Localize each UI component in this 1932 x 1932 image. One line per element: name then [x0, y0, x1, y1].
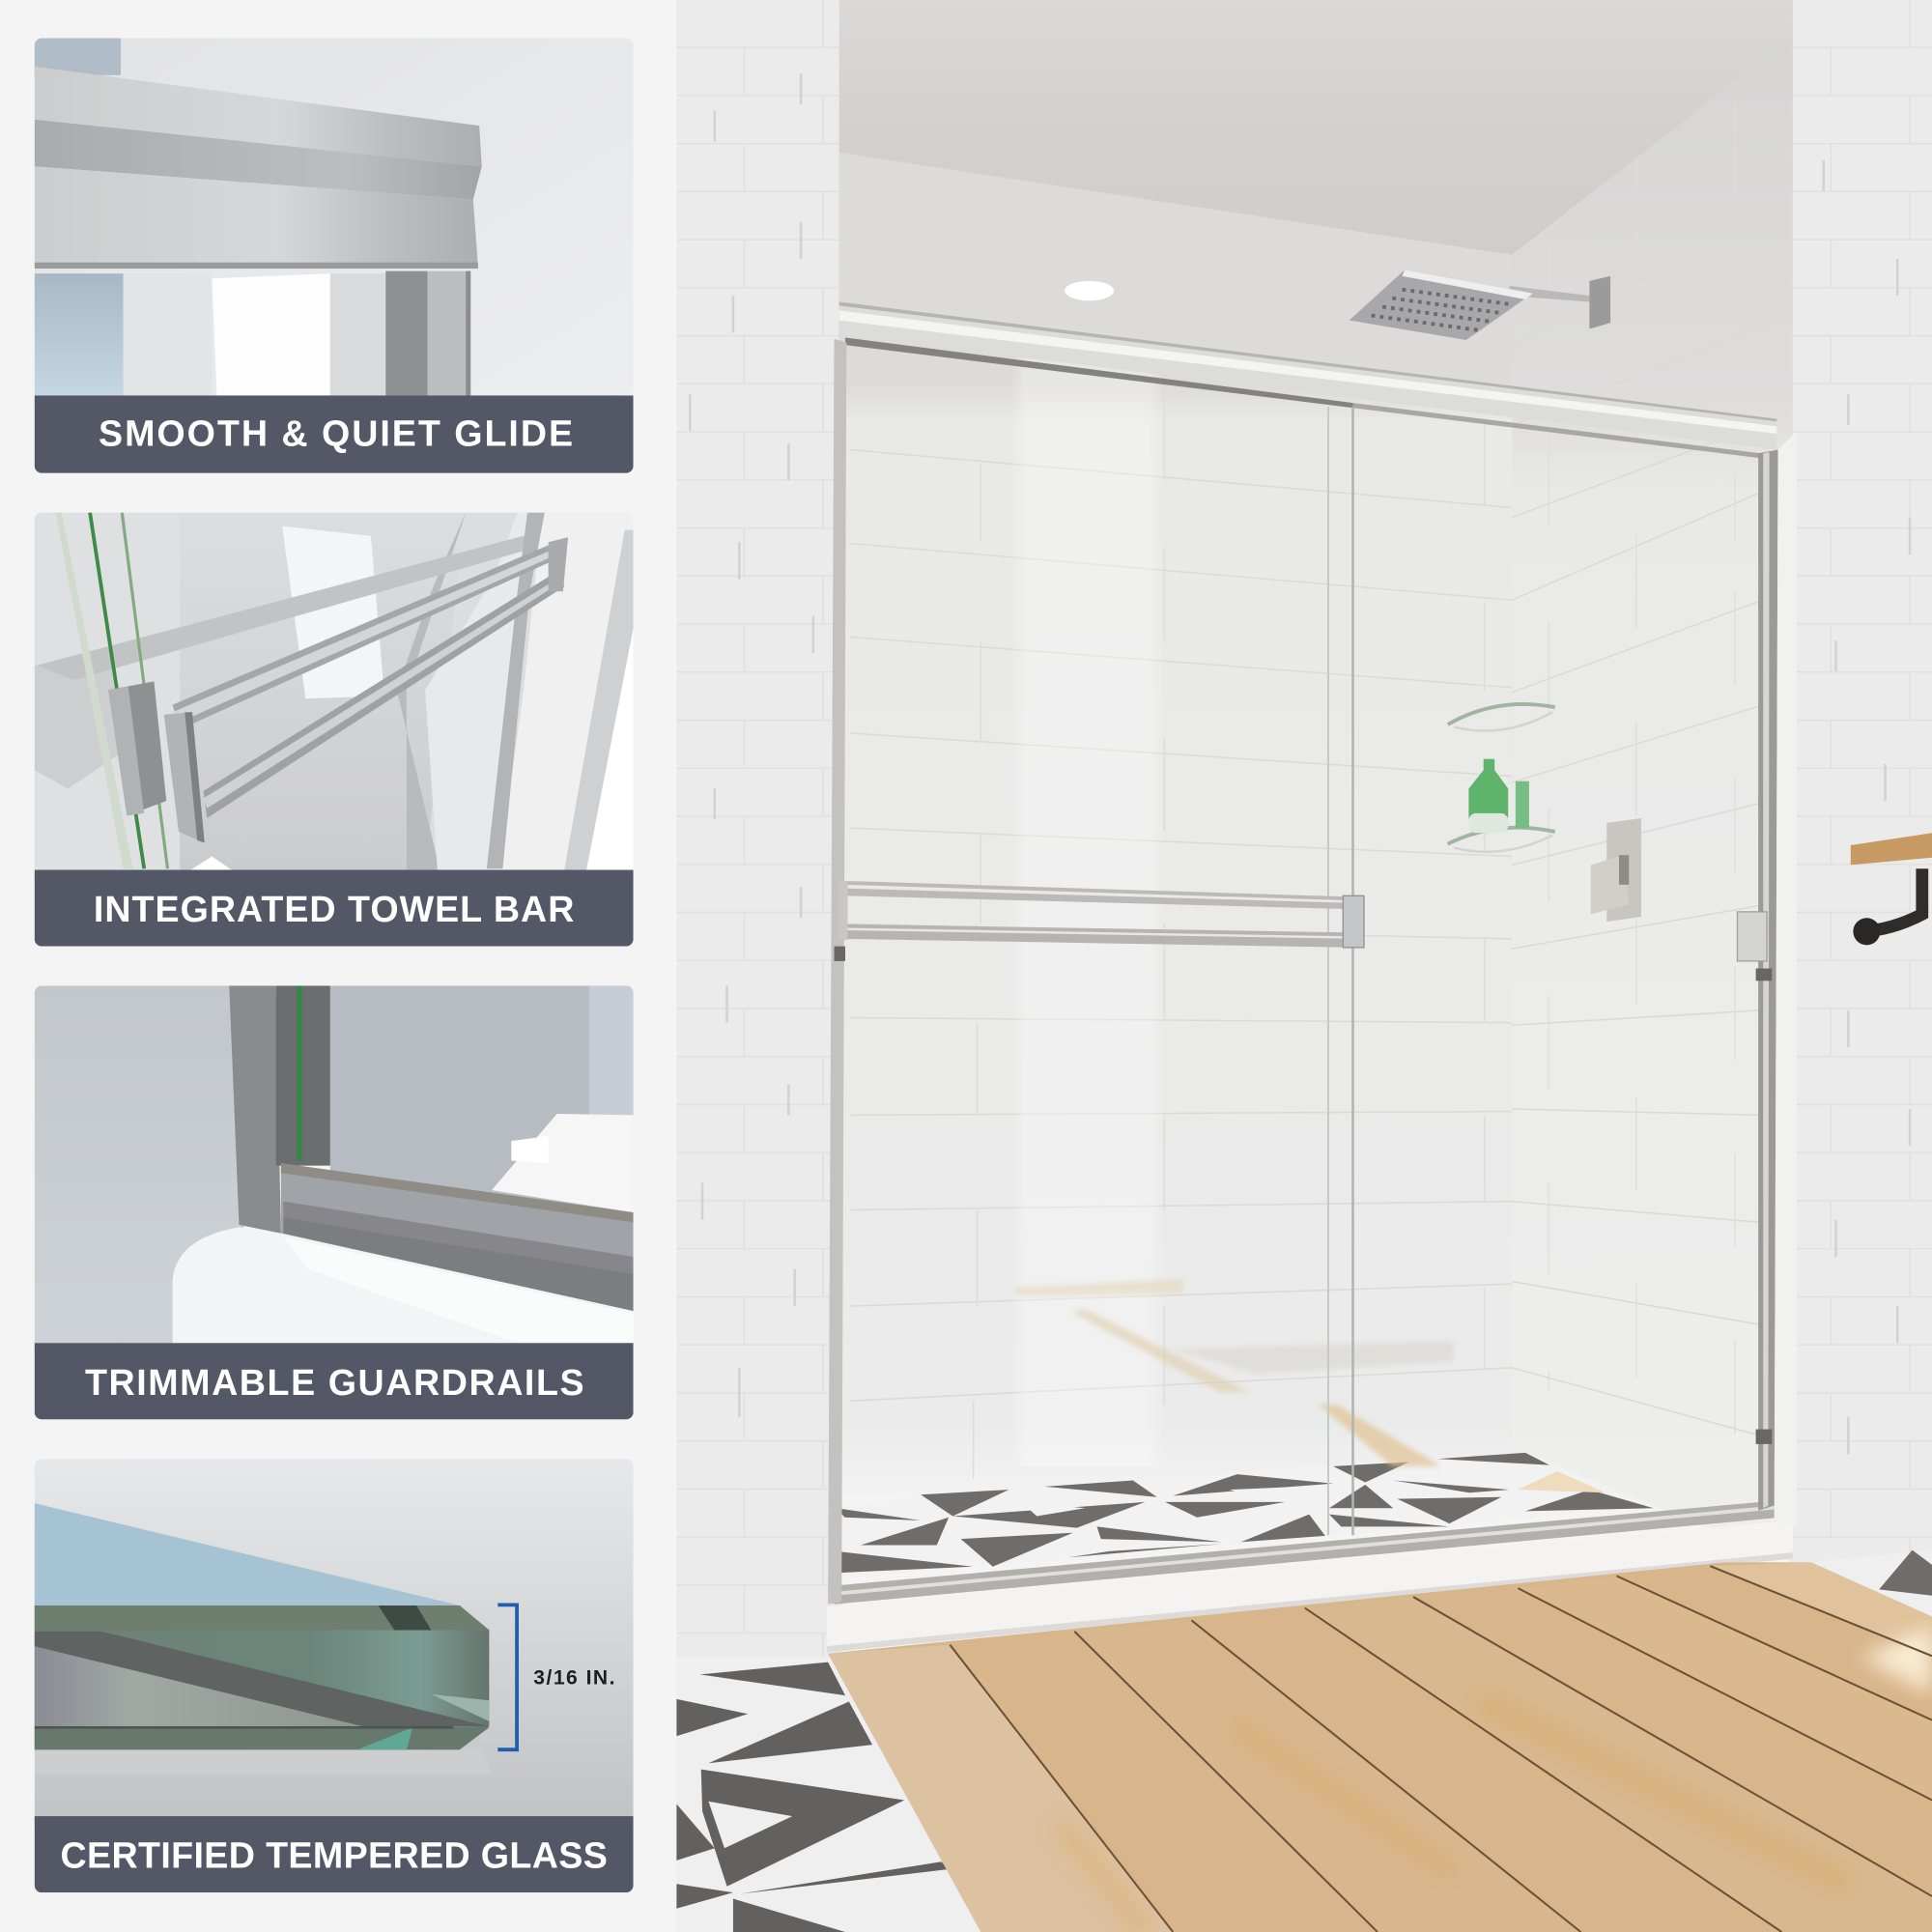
left door jamb: [828, 339, 846, 1605]
caption bar: TRIMMABLE GUARDRAILS: [85, 1362, 584, 1403]
back shower wall: [837, 153, 1512, 1506]
bathroom floor tiles: [676, 1550, 1932, 1932]
shower valve: [1591, 818, 1641, 922]
panel: smooth and quiet glide: [35, 39, 634, 473]
integrated towel bar: [838, 881, 1364, 948]
brick mortar accents: [690, 74, 1910, 1454]
left brick wall: [676, 0, 842, 1671]
caption bar: [35, 870, 634, 947]
top door rail: [839, 301, 1776, 458]
ceiling: [839, 0, 1793, 255]
dimension bracket: [497, 1605, 517, 1749]
caption bar: [35, 1343, 634, 1419]
left panel background: [0, 0, 676, 1932]
right shower wall: [1512, 37, 1793, 1559]
shower floor tiles: [837, 1453, 1658, 1579]
sunlight reflections on glass: [1010, 1279, 1454, 1466]
right door jamb: [1758, 431, 1797, 1528]
wall shelf with pipe bracket: [1851, 833, 1932, 945]
icon: green bottle: [1468, 759, 1508, 833]
main photo: shower scene: [676, 0, 1932, 1932]
right brick wall: [1789, 0, 1932, 1577]
caption bar: CERTIFIED TEMPERED GLASS: [60, 1835, 608, 1876]
icon: tube: [1516, 781, 1529, 828]
dimension label: 3/16 IN.: [533, 1667, 614, 1690]
close-up photo: top rail: [35, 39, 634, 408]
corner shelves with bottles: [1448, 704, 1555, 852]
panel: integrated towel bar: [35, 513, 634, 947]
glass edge illustration: [35, 1459, 634, 1829]
close-up photo: guardrail: [35, 985, 634, 1355]
shower curb: [827, 1605, 842, 1646]
bottom track: [835, 1501, 1775, 1605]
close-up photo: towel bar: [35, 513, 634, 882]
wood floor planks: [828, 1562, 1932, 1932]
panel: certified tempered glass: [35, 1459, 634, 1892]
caption bar: SMOOTH & QUIET GLIDE: [99, 413, 573, 454]
caption bar: [35, 395, 634, 473]
caption bar: INTEGRATED TOWEL BAR: [94, 889, 574, 929]
caption bar: [35, 1816, 634, 1892]
ceiling light reflection: [1065, 281, 1114, 300]
icon: rain shower head: [1350, 270, 1610, 340]
panel: trimmable guardrails: [35, 985, 634, 1419]
door catch and guide hardware: [835, 912, 1772, 1444]
glass door edges: [1328, 407, 1353, 1535]
